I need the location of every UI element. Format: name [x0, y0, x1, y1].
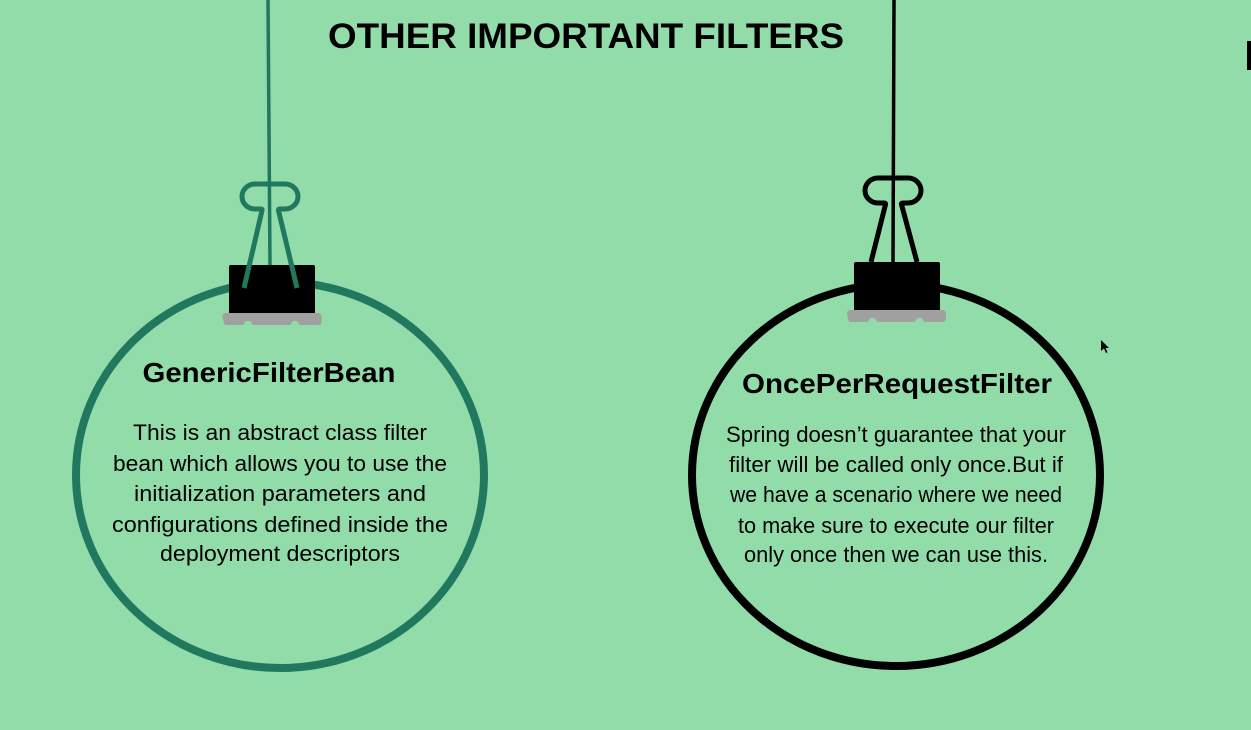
hanging string: [893, 0, 894, 262]
description: bean which allows you to use the: [113, 451, 447, 476]
edge marker: [1247, 41, 1251, 70]
description: initialization parameters and: [134, 481, 426, 506]
description: This is an abstract class filter: [133, 420, 427, 445]
ornament: GenericFilterBean: [76, 0, 484, 668]
cursor icon: [1101, 340, 1109, 353]
description: Spring doesn’t guarantee that your: [726, 422, 1066, 447]
description: configurations defined inside the: [112, 512, 448, 537]
ring outline: [692, 284, 1100, 666]
ornament: OncePerRequestFilter: [692, 0, 1100, 666]
description: to make sure to execute our filter: [738, 513, 1054, 538]
binder clip: [847, 178, 946, 322]
ring outline: [76, 282, 484, 668]
description: filter will be called only once.But if: [729, 452, 1064, 477]
description: [112, 420, 448, 566]
description: we have a scenario where we need: [729, 482, 1062, 507]
binder clip: [222, 184, 322, 325]
heading: OncePerRequestFilter: [742, 368, 1052, 399]
hanging string: [268, 0, 270, 265]
description: only once then we can use this.: [744, 542, 1048, 567]
description: [726, 422, 1066, 567]
description: deployment descriptors: [160, 541, 400, 566]
title: OTHER IMPORTANT FILTERS: [328, 16, 844, 56]
heading: GenericFilterBean: [142, 357, 396, 388]
